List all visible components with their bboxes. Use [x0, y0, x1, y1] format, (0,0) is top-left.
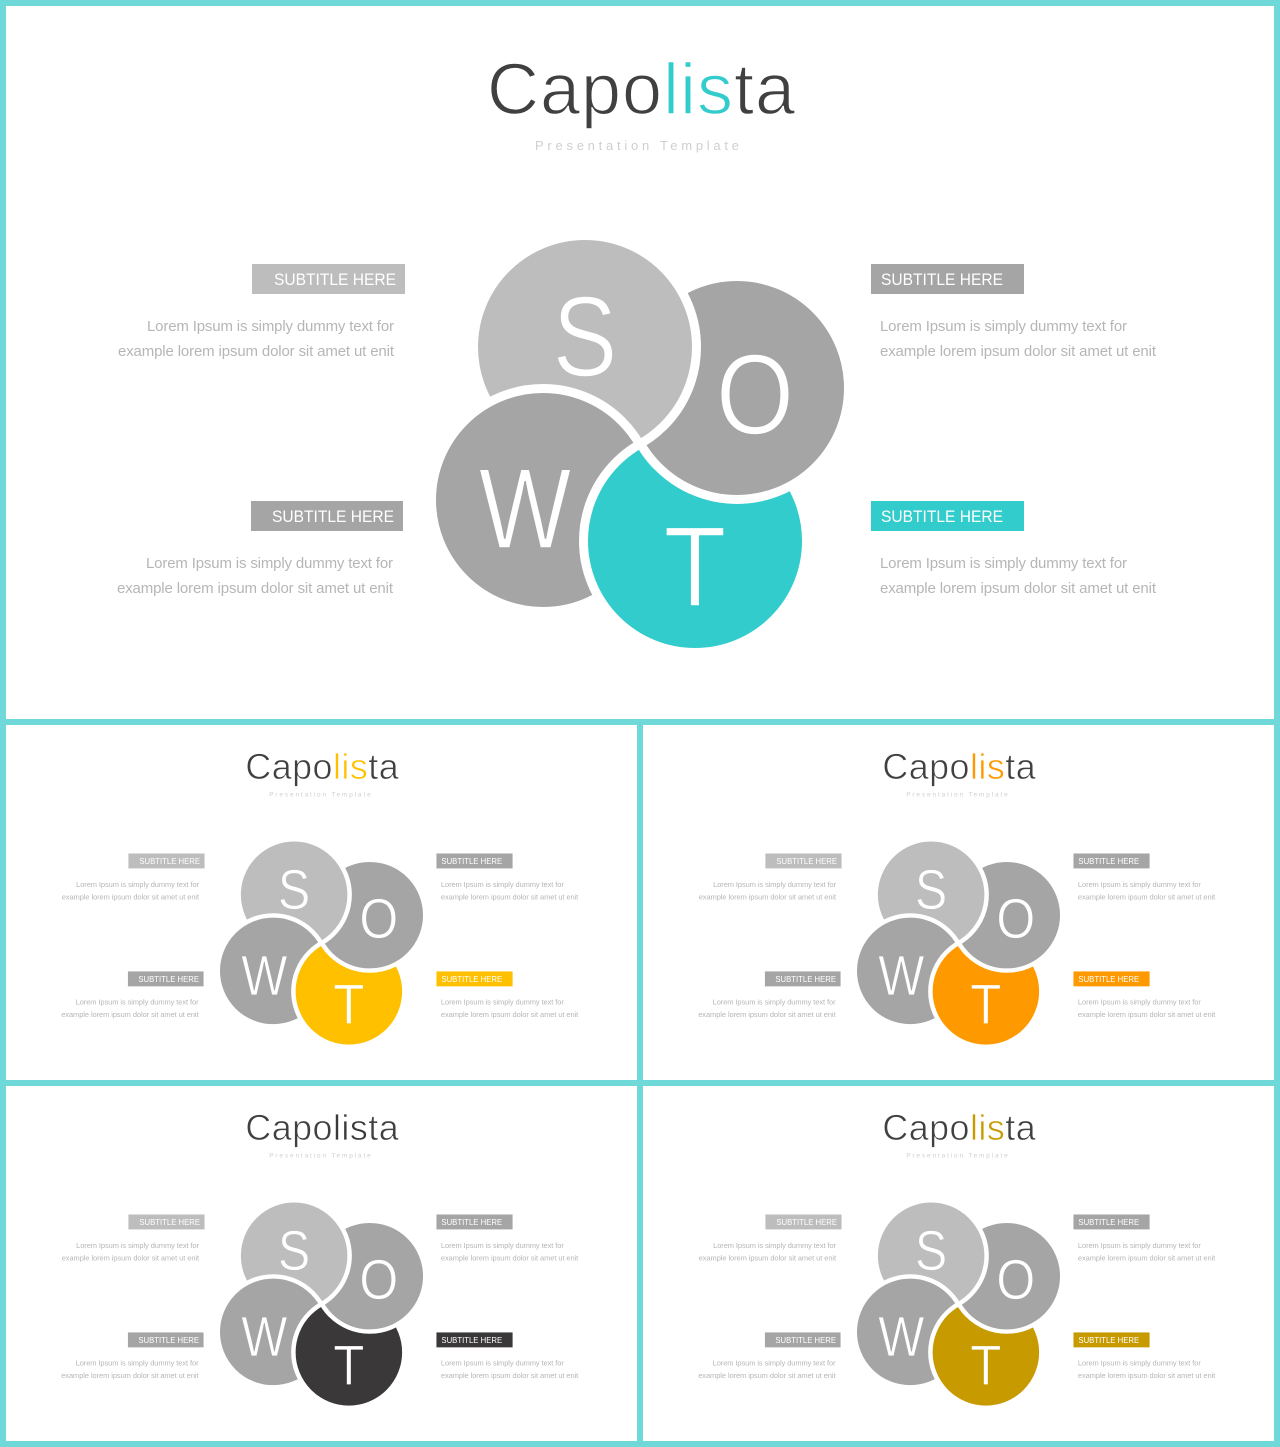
opportunities label and text: [871, 264, 1157, 360]
strengths label and text: [699, 853, 842, 901]
weaknesses label and text: Lorem Ipsum is simply dummy text for: [76, 1359, 199, 1368]
SWOT pinwheel diagram: W: [878, 944, 924, 1008]
strengths label and text: example lorem ipsum dolor sit amet ut enit: [62, 892, 200, 901]
threats label and text: example lorem ipsum dolor sit amet ut enit: [441, 1371, 579, 1380]
opportunities label and text: [436, 1214, 579, 1262]
SWOT pinwheel diagram: W: [241, 944, 287, 1008]
panel: charcoal SWOT slide: [6, 1086, 637, 1441]
strengths label and text: SUBTITLE HERE: [139, 856, 200, 866]
tagline: Presentation Template: [906, 1153, 1008, 1160]
strengths label and text: Lorem Ipsum is simply dummy text for: [713, 880, 837, 889]
SWOT pinwheel diagram: [855, 839, 1062, 1047]
strengths label and text: example lorem ipsum dolor sit amet ut enit: [62, 1253, 200, 1262]
threats label and text: Lorem Ipsum is simply dummy text for: [441, 998, 564, 1007]
strengths label and text: Lorem Ipsum is simply dummy text for: [713, 1241, 837, 1250]
weaknesses label and text: [698, 971, 841, 1019]
strengths label and text: Lorem Ipsum is simply dummy text for: [76, 880, 200, 889]
strengths label and text: SUBTITLE HERE: [776, 856, 837, 866]
panel: gold SWOT slide: [643, 1086, 1274, 1441]
title: Capolista: [245, 747, 399, 787]
opportunities label and text: SUBTITLE HERE: [881, 270, 1003, 289]
opportunities label and text: SUBTITLE HERE: [441, 856, 502, 866]
SWOT pinwheel diagram: [855, 1200, 1062, 1408]
weaknesses label and text: example lorem ipsum dolor sit amet ut enit: [61, 1371, 200, 1380]
opportunities label and text: example lorem ipsum dolor sit amet ut enit: [441, 892, 579, 901]
weaknesses label and text: SUBTITLE HERE: [775, 1335, 836, 1345]
strengths label and text: Lorem Ipsum is simply dummy text for: [76, 1241, 200, 1250]
title: Capolista: [487, 50, 796, 130]
panel: orange SWOT slide: [643, 725, 1274, 1080]
threats label and text: SUBTITLE HERE: [441, 1335, 502, 1345]
threats label and text: Lorem Ipsum is simply dummy text for: [441, 1359, 564, 1368]
SWOT pinwheel diagram: S: [915, 859, 947, 922]
SWOT pinwheel diagram: W: [241, 1305, 287, 1369]
threats label and text: [1073, 971, 1216, 1019]
SWOT pinwheel diagram: [218, 1200, 425, 1408]
SWOT pinwheel diagram: O: [996, 1249, 1035, 1312]
SWOT pinwheel diagram: [432, 236, 848, 652]
strengths label and text: example lorem ipsum dolor sit amet ut enit: [699, 1253, 837, 1262]
tagline: Presentation Template: [269, 792, 371, 799]
SWOT pinwheel diagram: W: [479, 445, 571, 573]
opportunities label and text: Lorem Ipsum is simply dummy text for: [441, 880, 564, 889]
strengths label and text: [699, 1214, 842, 1262]
strengths label and text: example lorem ipsum dolor sit amet ut enit: [699, 892, 837, 901]
strengths label and text: SUBTITLE HERE: [274, 270, 396, 289]
threats label and text: SUBTITLE HERE: [1078, 1335, 1139, 1345]
panel: yellow SWOT slide: [6, 725, 637, 1080]
SWOT pinwheel diagram: O: [996, 888, 1035, 951]
opportunities label and text: Lorem Ipsum is simply dummy text for: [1078, 1241, 1201, 1250]
opportunities label and text: SUBTITLE HERE: [1078, 1217, 1139, 1227]
threats label and text: [436, 1332, 579, 1380]
opportunities label and text: Lorem Ipsum is simply dummy text for: [441, 1241, 564, 1250]
SWOT pinwheel diagram: T: [970, 1334, 1001, 1397]
SWOT pinwheel diagram: T: [970, 973, 1001, 1036]
title: Capolista: [245, 1108, 399, 1148]
threats label and text: example lorem ipsum dolor sit amet ut enit: [441, 1010, 579, 1019]
strengths label and text: Lorem Ipsum is simply dummy text for: [147, 318, 394, 335]
threats label and text: SUBTITLE HERE: [1078, 974, 1139, 984]
weaknesses label and text: Lorem Ipsum is simply dummy text for: [713, 998, 836, 1007]
title: Capolista: [882, 747, 1036, 787]
weaknesses label and text: [61, 1332, 204, 1380]
SWOT pinwheel diagram: W: [878, 1305, 924, 1369]
threats label and text: example lorem ipsum dolor sit amet ut enit: [1078, 1371, 1216, 1380]
weaknesses label and text: example lorem ipsum dolor sit amet ut enit: [698, 1010, 837, 1019]
threats label and text: Lorem Ipsum is simply dummy text for: [1078, 998, 1201, 1007]
threats label and text: SUBTITLE HERE: [441, 974, 502, 984]
strengths label and text: SUBTITLE HERE: [139, 1217, 200, 1227]
opportunities label and text: SUBTITLE HERE: [441, 1217, 502, 1227]
opportunities label and text: Lorem Ipsum is simply dummy text for: [880, 318, 1127, 335]
SWOT pinwheel diagram: O: [359, 888, 398, 951]
strengths label and text: [118, 264, 405, 360]
weaknesses label and text: SUBTITLE HERE: [775, 974, 836, 984]
opportunities label and text: example lorem ipsum dolor sit amet ut enit: [1078, 1253, 1216, 1262]
opportunities label and text: [1073, 1214, 1216, 1262]
SWOT pinwheel diagram: O: [716, 331, 794, 458]
panel: main teal SWOT slide: [6, 6, 1274, 719]
strengths label and text: example lorem ipsum dolor sit amet ut enit: [118, 343, 395, 360]
SWOT pinwheel diagram: S: [915, 1220, 947, 1283]
threats label and text: Lorem Ipsum is simply dummy text for: [1078, 1359, 1201, 1368]
weaknesses label and text: example lorem ipsum dolor sit amet ut enit: [698, 1371, 837, 1380]
threats label and text: Lorem Ipsum is simply dummy text for: [880, 555, 1127, 572]
tagline: Presentation Template: [269, 1153, 371, 1160]
opportunities label and text: example lorem ipsum dolor sit amet ut enit: [880, 343, 1157, 360]
strengths label and text: [62, 1214, 205, 1262]
weaknesses label and text: SUBTITLE HERE: [138, 1335, 199, 1345]
SWOT pinwheel diagram: S: [553, 274, 617, 401]
opportunities label and text: SUBTITLE HERE: [1078, 856, 1139, 866]
weaknesses label and text: Lorem Ipsum is simply dummy text for: [713, 1359, 836, 1368]
SWOT pinwheel diagram: T: [664, 503, 726, 630]
SWOT pinwheel diagram: S: [278, 1220, 310, 1283]
opportunities label and text: [436, 853, 579, 901]
opportunities label and text: example lorem ipsum dolor sit amet ut enit: [1078, 892, 1216, 901]
threats label and text: [436, 971, 579, 1019]
SWOT pinwheel diagram: T: [333, 973, 364, 1036]
threats label and text: [1073, 1332, 1216, 1380]
opportunities label and text: example lorem ipsum dolor sit amet ut enit: [441, 1253, 579, 1262]
tagline: Presentation Template: [906, 792, 1008, 799]
SWOT pinwheel diagram: O: [359, 1249, 398, 1312]
SWOT pinwheel diagram: [218, 839, 425, 1047]
threats label and text: example lorem ipsum dolor sit amet ut enit: [880, 580, 1157, 597]
weaknesses label and text: [61, 971, 204, 1019]
tagline: Presentation Template: [535, 138, 739, 153]
weaknesses label and text: SUBTITLE HERE: [272, 507, 394, 526]
title: Capolista: [882, 1108, 1036, 1148]
threats label and text: example lorem ipsum dolor sit amet ut enit: [1078, 1010, 1216, 1019]
threats label and text: SUBTITLE HERE: [881, 507, 1003, 526]
opportunities label and text: Lorem Ipsum is simply dummy text for: [1078, 880, 1201, 889]
weaknesses label and text: SUBTITLE HERE: [138, 974, 199, 984]
SWOT pinwheel diagram: T: [333, 1334, 364, 1397]
threats label and text: [871, 501, 1157, 597]
weaknesses label and text: example lorem ipsum dolor sit amet ut enit: [61, 1010, 200, 1019]
SWOT pinwheel diagram: S: [278, 859, 310, 922]
weaknesses label and text: [117, 501, 403, 597]
strengths label and text: [62, 853, 205, 901]
weaknesses label and text: [698, 1332, 841, 1380]
weaknesses label and text: Lorem Ipsum is simply dummy text for: [146, 555, 393, 572]
strengths label and text: SUBTITLE HERE: [776, 1217, 837, 1227]
weaknesses label and text: example lorem ipsum dolor sit amet ut enit: [117, 580, 394, 597]
opportunities label and text: [1073, 853, 1216, 901]
weaknesses label and text: Lorem Ipsum is simply dummy text for: [76, 998, 199, 1007]
